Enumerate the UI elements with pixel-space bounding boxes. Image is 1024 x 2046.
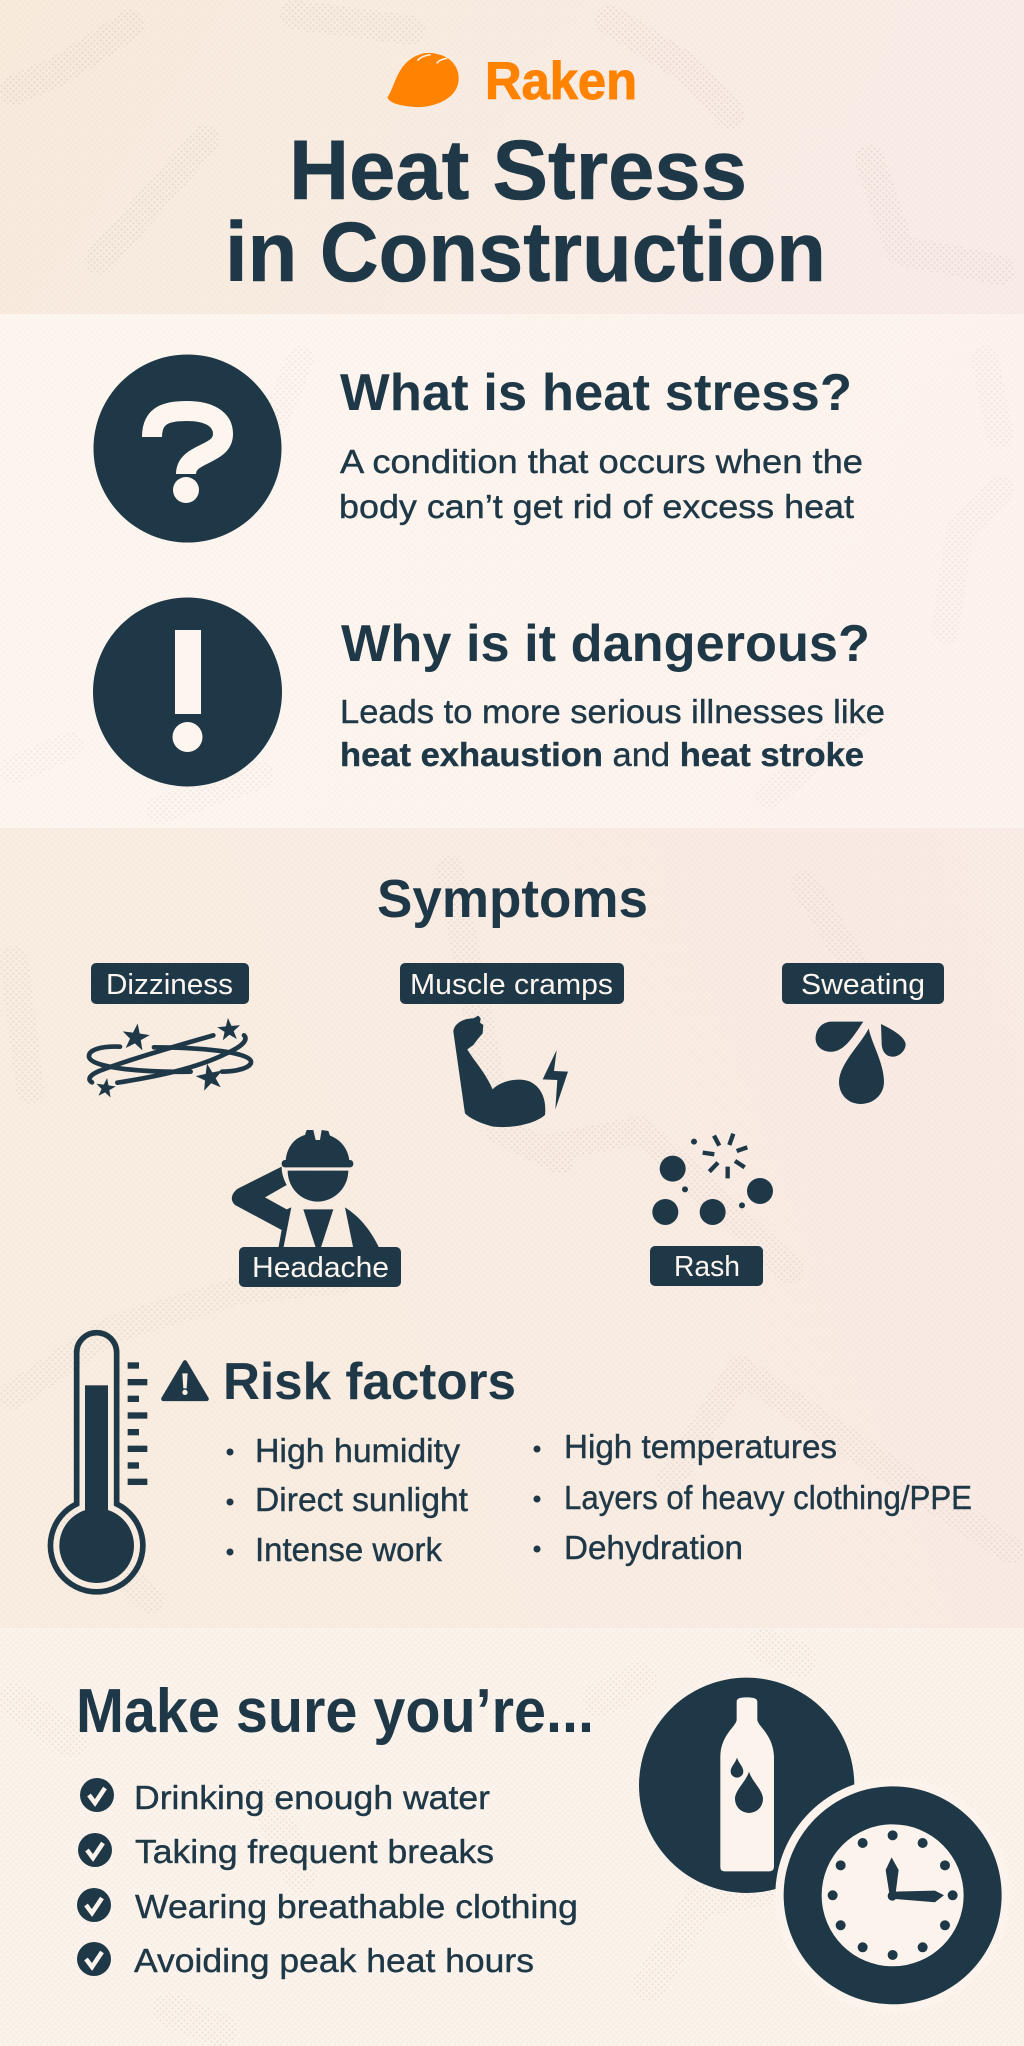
symptom: headache: Headache: [252, 1252, 389, 1284]
icon: water bottle: [639, 1678, 854, 1893]
panel: what and why: [0, 314, 1024, 828]
risk list: left column: Direct sunlight: [255, 1481, 468, 1518]
text: definition: body can’t get rid of excess heat: [339, 488, 854, 525]
item: frequent breaks: Taking frequent breaks: [135, 1833, 494, 1870]
icon: sweat drops: [816, 1022, 906, 1104]
symptom: dizziness: Dizziness: [106, 969, 233, 1001]
logo: Raken: [387, 52, 637, 111]
symptom: rash: Rash: [674, 1251, 740, 1283]
risk factors heading: Risk factors: [223, 1353, 516, 1411]
icon: orange hard hat: [387, 53, 459, 107]
risk list: left column: [226, 1432, 468, 1568]
logo: Raken: Raken: [485, 52, 637, 111]
title: in Construction: [225, 205, 826, 299]
heading: make sure: Make sure you’re...: [76, 1677, 594, 1746]
risk list: left column: Intense work: [255, 1531, 442, 1568]
icon: worker holding head: [232, 1130, 379, 1248]
text: danger explanation: [340, 693, 885, 773]
risk list: right column: Layers of heavy clothing/PPE: [564, 1479, 972, 1516]
symptom: muscle cramps: Muscle cramps: [410, 969, 613, 1001]
icon: clock: [775, 1778, 1010, 2013]
risk list: right column: Dehydration: [564, 1529, 743, 1566]
text: definition: [339, 443, 863, 525]
symptom: rash: [650, 1134, 773, 1286]
icon: exclamation circle: [93, 598, 282, 786]
title: [225, 123, 826, 299]
item: drinking water: Drinking enough water: [134, 1779, 490, 1816]
icon: water bottle and clock: [639, 1678, 1010, 2013]
text: danger explanation: Leads to more serious illnesses like: [340, 693, 885, 730]
risk list: right column: [534, 1428, 972, 1566]
title: Heat Stress: [289, 123, 747, 217]
symptom: headache: [232, 1130, 401, 1287]
icon: flexed arm with bolt: [453, 1016, 568, 1127]
risk list: right column: High temperatures: [564, 1428, 837, 1465]
icon: warning triangle: [163, 1362, 207, 1399]
icon: dizziness stars: [89, 1017, 251, 1098]
heading: symptoms: Symptoms: [377, 869, 648, 929]
item: breathable clothing: Wearing breathable clothing: [135, 1888, 578, 1925]
icon: rash spots: [652, 1134, 773, 1225]
checklist: [77, 1778, 578, 1979]
icon: question mark circle: [94, 354, 282, 542]
symptom: muscle cramps: [400, 963, 624, 1127]
text: definition: A condition that occurs when the: [340, 443, 863, 480]
text: danger explanation: heat exhaustion and heat stroke: [340, 736, 864, 773]
icon: thermometer: [50, 1333, 147, 1592]
panel: header: [0, 0, 1024, 314]
symptom: dizziness: [89, 963, 251, 1098]
symptom: sweating: Sweating: [801, 969, 925, 1001]
risk list: left column: High humidity: [255, 1432, 461, 1469]
panel: symptoms and risk factors: [0, 828, 1024, 1628]
panel: make sure you're: [0, 1628, 1024, 2046]
item: peak heat: Avoiding peak heat hours: [134, 1942, 534, 1979]
heading: what is heat stress: What is heat stress?: [340, 364, 852, 422]
heading: why is it dangerous: Why is it dangerous?: [341, 615, 870, 673]
symptom: sweating: [782, 963, 944, 1104]
